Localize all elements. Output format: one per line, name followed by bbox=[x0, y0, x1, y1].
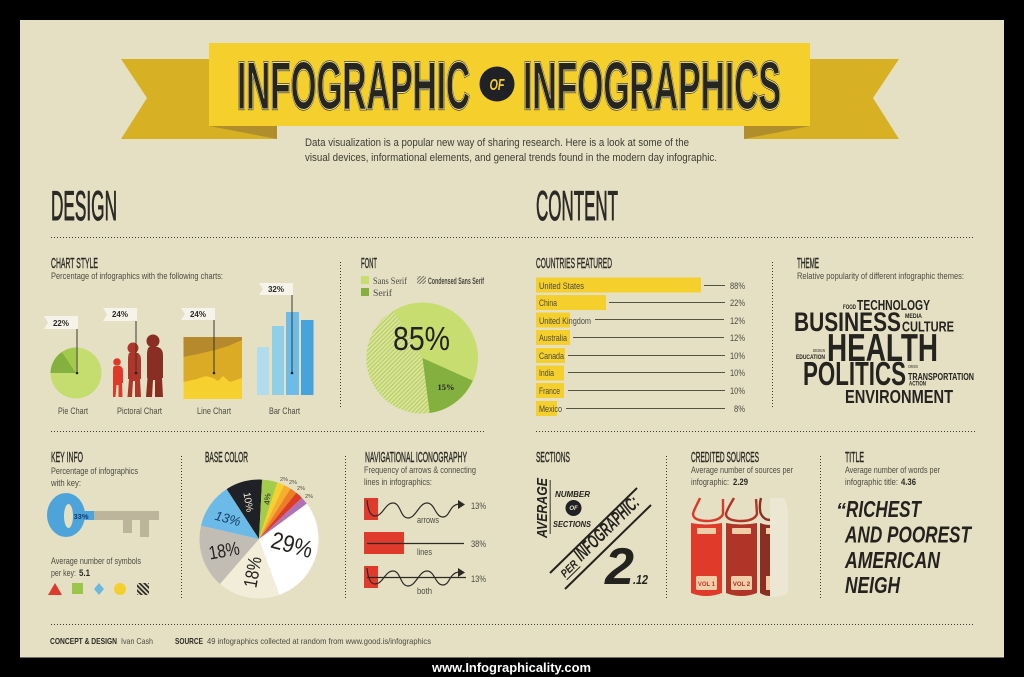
panel: theme: THEME bbox=[797, 255, 819, 272]
book 3 bbox=[760, 498, 770, 596]
word cloud: TECHNOLOGY bbox=[857, 298, 930, 314]
quoted title lines: AND POOREST bbox=[844, 522, 972, 548]
panel: title: TITLE bbox=[845, 449, 864, 466]
panel: chart style: Percentage of infographics with the following charts: bbox=[51, 271, 223, 282]
panel: countries featured: 10% bbox=[730, 386, 745, 397]
intro text: visual devices, informational elements, and general trends found in the modern day infographic. bbox=[305, 152, 717, 164]
panel: key info: 5.1 bbox=[79, 568, 91, 579]
panel: credited sources bbox=[691, 449, 793, 597]
arrows row: arrows bbox=[417, 515, 439, 526]
panel: theme: Relative popularity of different infographic themes: bbox=[797, 271, 964, 282]
word cloud: ENVIRONMENT bbox=[845, 387, 953, 407]
sections typographic graphic bbox=[534, 477, 651, 596]
font pie chart: 85% bbox=[393, 320, 450, 357]
panel: credited sources: 2.29 bbox=[733, 477, 748, 488]
word cloud: HEALTH bbox=[827, 327, 938, 370]
base color pie chart: 18% bbox=[207, 538, 241, 565]
footer credits: Ivan Cash bbox=[121, 636, 153, 646]
quoted title lines: RICHEST bbox=[846, 496, 922, 522]
base color pie chart: 2% bbox=[280, 477, 288, 483]
lines row: 38% bbox=[471, 539, 486, 550]
key graphic: 33% bbox=[73, 512, 89, 521]
lines row: lines bbox=[417, 547, 432, 558]
sections typographic graphic: .12 bbox=[633, 572, 649, 587]
book 2: VOL 2 bbox=[733, 582, 751, 588]
text: DESIGN bbox=[51, 182, 117, 229]
sections typographic graphic: OF bbox=[569, 506, 578, 512]
base color pie chart: 10% bbox=[240, 491, 255, 513]
word cloud: DESIGN bbox=[813, 348, 825, 353]
font legend: Serif bbox=[373, 288, 392, 298]
footer credits: SOURCE bbox=[175, 636, 203, 646]
panel: title: Average number of words per bbox=[845, 465, 940, 476]
country bars bbox=[536, 278, 701, 416]
font legend: Sans Serif bbox=[373, 276, 407, 286]
panel: font bbox=[361, 255, 485, 414]
panel: countries featured: 12% bbox=[730, 333, 745, 344]
arrows row: 13% bbox=[471, 501, 486, 512]
panel: credited sources: CREDITED SOURCES bbox=[691, 449, 759, 466]
lines row bbox=[364, 532, 486, 558]
panel: navigational iconography: Frequency of arrows & connecting bbox=[364, 465, 476, 476]
panel: countries featured: United Kingdom bbox=[539, 316, 591, 327]
panel: countries featured: India bbox=[539, 368, 555, 379]
panel: countries featured: COUNTRIES FEATURED bbox=[536, 255, 612, 272]
panel: countries featured: Australia bbox=[539, 333, 568, 344]
text: CONTENT bbox=[536, 182, 618, 229]
quoted title lines: “ bbox=[836, 500, 846, 522]
panel: countries featured: 8% bbox=[734, 404, 745, 415]
panel: countries featured bbox=[536, 255, 745, 416]
intro text: Data visualization is a popular new way of sharing research. Here is a look at some of the bbox=[305, 137, 689, 149]
quoted title lines: AMERICAN bbox=[844, 547, 940, 573]
panel: base color bbox=[199, 449, 318, 598]
line chart: 24% bbox=[190, 310, 206, 319]
footer credits bbox=[50, 636, 431, 646]
books bbox=[691, 498, 788, 597]
panel: countries featured: France bbox=[539, 386, 560, 397]
panel: key info: KEY INFO bbox=[51, 449, 83, 466]
title text: INFOGRAPHIC bbox=[237, 48, 470, 124]
panel: title bbox=[836, 449, 972, 598]
panel: countries featured: China bbox=[539, 298, 558, 309]
panel: countries featured: 12% bbox=[730, 316, 745, 327]
panel: key info: Average number of symbols bbox=[51, 556, 141, 567]
bar chart: 32% bbox=[268, 285, 284, 294]
pictorial chart: Pictoral Chart bbox=[117, 406, 162, 417]
line chart: Line Chart bbox=[197, 406, 231, 417]
bar chart: Bar Chart bbox=[269, 406, 300, 417]
intro text bbox=[305, 137, 717, 164]
panel: credited sources: infographic: bbox=[691, 477, 729, 488]
panel: navigational iconography bbox=[364, 449, 486, 597]
base color pie chart: 2% bbox=[289, 480, 297, 486]
word cloud: CRISIS bbox=[908, 364, 918, 369]
pie chart bbox=[44, 316, 102, 417]
title banner bbox=[121, 43, 899, 139]
word cloud: ACTION bbox=[909, 382, 926, 388]
quoted title lines: NEIGH bbox=[845, 572, 900, 598]
panel: title: 4.36 bbox=[901, 477, 916, 488]
sections typographic graphic: AVERAGE bbox=[534, 477, 551, 539]
panel: title: infographic title: bbox=[845, 477, 898, 488]
font pie chart bbox=[366, 302, 478, 414]
panel: key info: with key: bbox=[50, 478, 81, 489]
panel: navigational iconography: NAVIGATIONAL ICONOGRAPHY bbox=[365, 449, 467, 466]
panel: font: FONT bbox=[361, 255, 377, 272]
sections typographic graphic: INFOGRAPHIC: bbox=[570, 492, 644, 565]
both row: both bbox=[417, 586, 432, 597]
panel: countries featured: 10% bbox=[730, 368, 745, 379]
pictorial chart bbox=[103, 308, 163, 417]
word cloud: EDUCATION bbox=[796, 354, 825, 361]
panel: sections: SECTIONS bbox=[536, 449, 570, 466]
word cloud: FOOD bbox=[843, 305, 856, 311]
base color pie chart: 29% bbox=[268, 527, 316, 564]
base color pie chart: 4% bbox=[263, 493, 272, 505]
word cloud: CULTURE bbox=[902, 318, 954, 336]
panel: key info bbox=[47, 449, 159, 595]
panel: countries featured: Canada bbox=[539, 351, 565, 362]
pie chart: Pie Chart bbox=[58, 406, 88, 417]
panel: key info: per key: bbox=[51, 568, 76, 579]
panel: countries featured: 10% bbox=[730, 351, 745, 362]
sections typographic graphic: SECTIONS bbox=[553, 520, 592, 529]
sections typographic graphic: 2 bbox=[604, 538, 634, 596]
base color pie chart bbox=[199, 477, 318, 598]
pictorial chart: 24% bbox=[112, 310, 128, 319]
word cloud: POLITICS bbox=[803, 355, 906, 392]
panel: chart style: CHART STYLE bbox=[51, 255, 98, 272]
footer credits: CONCEPT & DESIGN bbox=[50, 636, 117, 646]
font pie chart: 15% bbox=[438, 382, 454, 392]
sections typographic graphic: PER bbox=[559, 558, 581, 580]
pie chart: 22% bbox=[53, 319, 69, 328]
quoted title lines bbox=[836, 496, 972, 598]
panel: chart style bbox=[44, 255, 314, 417]
panel: countries featured: 88% bbox=[730, 281, 745, 292]
panel: countries featured: 22% bbox=[730, 298, 745, 309]
base color pie chart: 2% bbox=[305, 494, 313, 500]
panel: theme bbox=[794, 255, 974, 407]
panel: navigational iconography: lines in infographics: bbox=[364, 477, 432, 488]
word cloud: MEDIA bbox=[905, 314, 923, 320]
panel: key info: Percentage of infographics bbox=[51, 466, 138, 477]
panel: sections bbox=[534, 449, 651, 596]
font legend bbox=[361, 276, 485, 298]
font legend: Condensed Sans Serif bbox=[428, 276, 485, 286]
title text: OF bbox=[490, 77, 505, 94]
panel: credited sources: Average number of sources per bbox=[691, 465, 793, 476]
both row: 13% bbox=[471, 574, 486, 585]
key symbols bbox=[48, 583, 149, 595]
panel: countries featured: United States bbox=[539, 281, 584, 292]
base color pie chart: 13% bbox=[213, 508, 242, 529]
base color pie chart: 2% bbox=[297, 486, 305, 492]
panel: countries featured: Mexico bbox=[539, 404, 562, 415]
book 1: VOL 1 bbox=[698, 582, 716, 588]
line chart bbox=[181, 308, 242, 417]
word cloud bbox=[794, 298, 974, 407]
word cloud: BUSINESS bbox=[794, 307, 901, 337]
arrows row bbox=[364, 498, 486, 526]
bar chart bbox=[257, 283, 314, 417]
both row bbox=[364, 566, 486, 597]
word cloud: TRANSPORTATION bbox=[908, 372, 974, 383]
key graphic bbox=[47, 493, 159, 537]
watermark: www.Infographicality.com bbox=[431, 660, 591, 675]
ghost book bbox=[770, 498, 788, 597]
panel: base color: BASE COLOR bbox=[205, 449, 248, 466]
footer credits: 49 infographics collected at random from www.good.is/infographics bbox=[207, 636, 431, 646]
title text: INFOGRAPHIC bbox=[237, 48, 470, 124]
sections typographic graphic: NUMBER bbox=[555, 490, 590, 499]
base color pie chart: 18% bbox=[240, 555, 267, 589]
